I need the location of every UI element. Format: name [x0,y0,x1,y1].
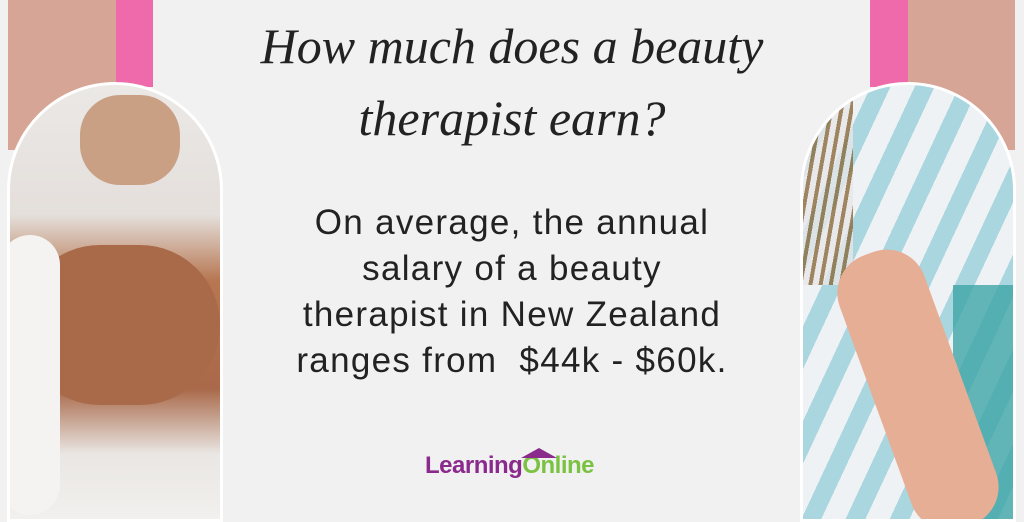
logo: Learning Online: LearningOnline [425,452,594,479]
icon: graduation cap [521,448,557,458]
decor: right pink bar [870,0,908,87]
body text: salary of a beauty [362,249,662,288]
photo: hands on striped towel [800,82,1016,522]
decor: left tan block [8,0,116,150]
decor: left pink bar [116,0,153,87]
decor: right tan block [908,0,1015,150]
body text [296,203,728,380]
title: therapist earn? [359,90,665,146]
title [260,18,764,146]
title: How much does a beauty [261,18,763,74]
photo: facial mask treatment [7,82,223,522]
body text: ranges from $44k - $60k. [296,341,728,380]
body text: therapist in New Zealand [303,295,721,334]
body text: On average, the annual [315,203,709,242]
